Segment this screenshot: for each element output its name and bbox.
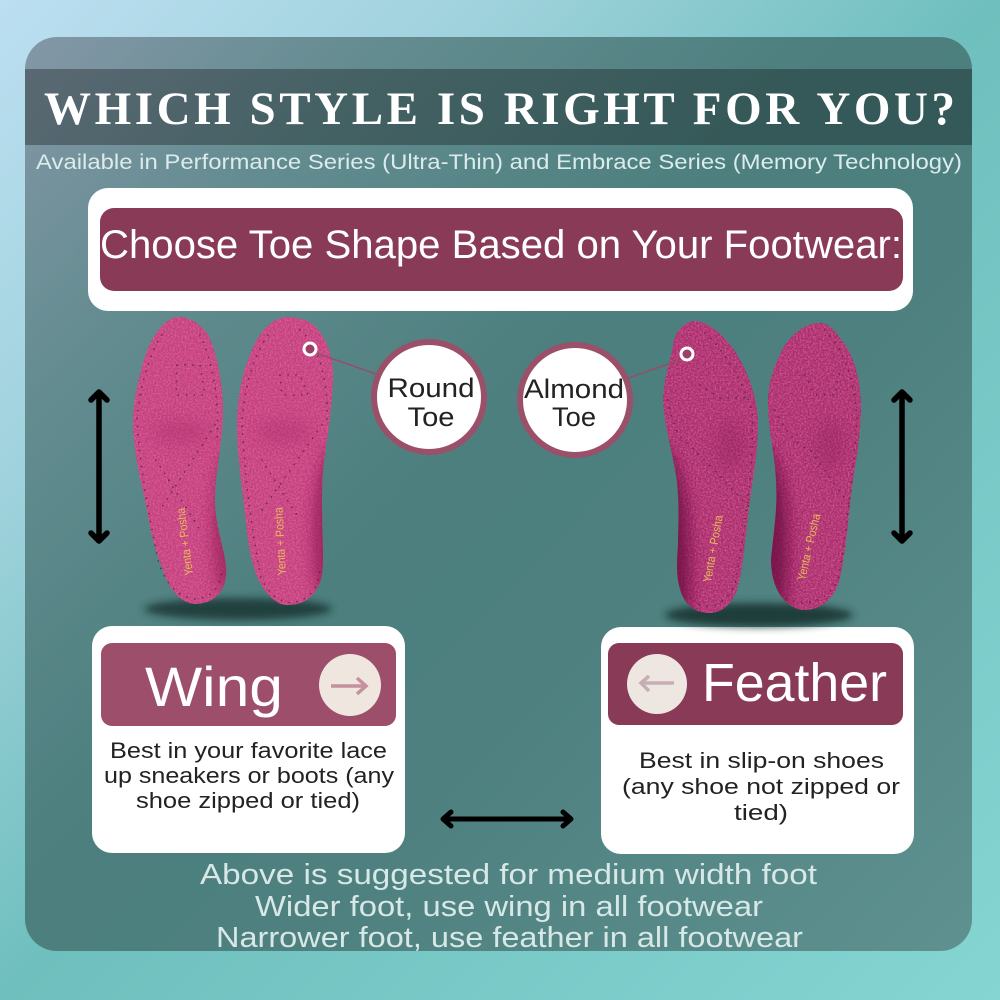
wing label bar bbox=[101, 643, 396, 726]
callout: almond toe bbox=[520, 345, 693, 455]
feather text bbox=[622, 748, 900, 825]
callout: almond toe: Almond bbox=[524, 374, 624, 404]
footnote text bbox=[200, 859, 817, 954]
subtitle: Available in Performance Series (Ultra-Thin) and Embrace Series (Memory Technology) bbox=[36, 151, 962, 174]
insole: round toe, left bbox=[133, 317, 226, 604]
callout: round toe: Toe bbox=[408, 402, 454, 432]
panel: wing description bbox=[92, 626, 405, 853]
title banner: WHICH STYLE IS RIGHT FOR YOU? bbox=[44, 83, 955, 135]
insole: round toe, right bbox=[236, 317, 333, 605]
callout: round toe bbox=[304, 342, 484, 452]
feather text: (any shoe not zipped or bbox=[622, 774, 900, 799]
wing label bar: Wing bbox=[145, 655, 283, 718]
wing text: up sneakers or boots (any bbox=[104, 763, 394, 788]
callout: round toe: Round bbox=[388, 373, 474, 403]
feather text: Best in slip-on shoes bbox=[639, 748, 884, 773]
callout: almond toe: Toe bbox=[552, 402, 596, 432]
footnote text: Narrower foot, use feather in all footwear bbox=[216, 922, 803, 954]
shadow: left insoles bbox=[144, 598, 332, 620]
brand text: Yenta + Posha bbox=[794, 512, 823, 582]
feather label bar: Feather bbox=[702, 653, 887, 713]
brand text: Yenta + Posha bbox=[700, 514, 726, 584]
feather label bar bbox=[608, 643, 903, 725]
footnote text: Wider foot, use wing in all footwear bbox=[255, 891, 763, 923]
feather text: tied) bbox=[734, 800, 788, 825]
wing text: Best in your favorite lace bbox=[110, 738, 387, 763]
title banner bbox=[25, 69, 972, 145]
arrow: right vertical bbox=[894, 392, 910, 541]
insole: almond toe, left bbox=[663, 321, 758, 613]
panel: choose toe shape heading: Choose Toe Shape Based on Your Footwear: bbox=[100, 223, 902, 267]
brand text: Yenta + Posha bbox=[174, 507, 196, 576]
brand text: Yenta + Posha bbox=[271, 507, 289, 576]
arrow: left vertical bbox=[91, 392, 107, 541]
insole: almond toe, right bbox=[768, 323, 861, 610]
shadow: right insoles bbox=[665, 603, 853, 627]
panel: feather description bbox=[601, 627, 914, 854]
footnote text: Above is suggested for medium width foot bbox=[200, 859, 817, 891]
wing text: shoe zipped or tied) bbox=[136, 788, 360, 813]
arrow: horizontal between panels bbox=[443, 812, 571, 826]
wing text bbox=[104, 738, 394, 813]
panel: choose toe shape heading bbox=[88, 188, 913, 311]
